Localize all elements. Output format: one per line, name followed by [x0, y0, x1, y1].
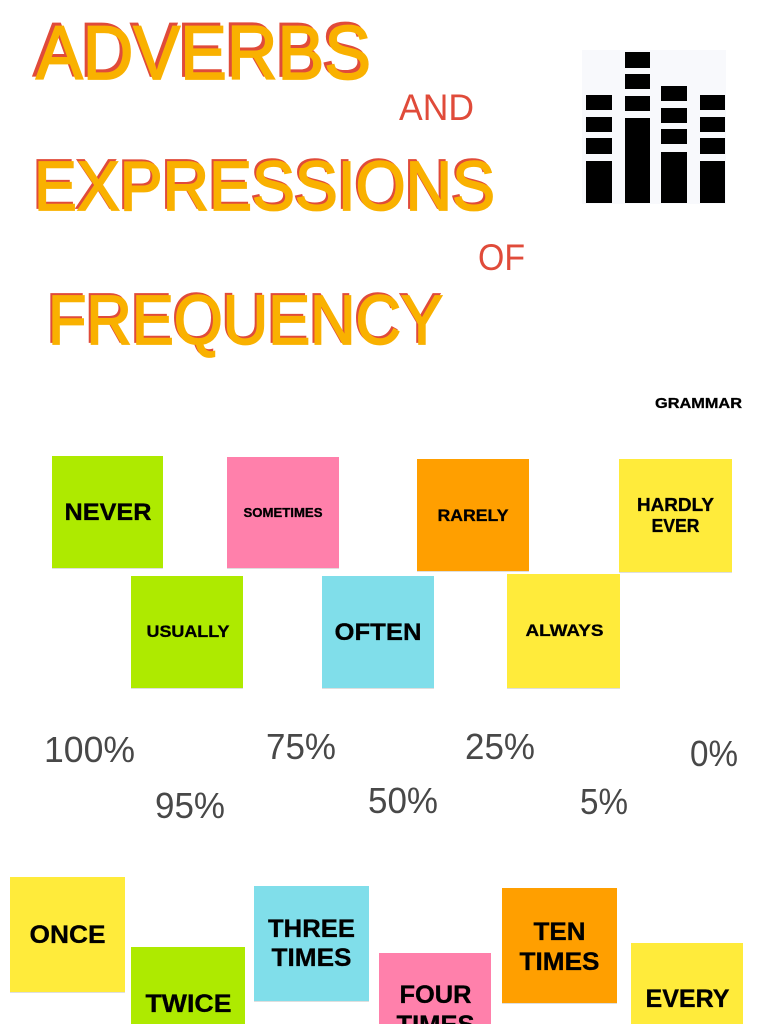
sticky note: FOUR TIMES: FOUR [400, 981, 472, 1009]
icon: frequency bars [582, 50, 726, 204]
sticky note: TEN TIMES: TIMES [520, 948, 600, 976]
sticky note: SOMETIMES: SOMETIMES [244, 505, 323, 520]
percent: 5%: 5% [580, 781, 628, 822]
title word: ADVERBS: ADVERBS [33, 8, 368, 93]
sticky note: NEVER: NEVER [64, 499, 152, 526]
sticky note: ONCE: ONCE [30, 921, 106, 949]
percent: 95%: 95% [155, 785, 225, 826]
sticky note: HARDLY EVER: EVER [652, 516, 700, 536]
sticky note: OFTEN: OFTEN [334, 619, 422, 646]
title word: FREQUENCY: FREQUENCY [46, 279, 441, 357]
sticky note: TEN TIMES [502, 888, 617, 1004]
sticky note: SOMETIMES [227, 457, 339, 569]
sticky note: USUALLY: USUALLY [146, 622, 230, 641]
title word: ADVERBS: ADVERBS [36, 11, 371, 96]
sticky note: RARELY: RARELY [438, 506, 509, 525]
percent: 0%: 0% [690, 733, 738, 774]
sticky note: EVERY [631, 943, 743, 1024]
sticky note: HARDLY EVER: HARDLY [637, 495, 714, 515]
title word: AND: AND [399, 87, 474, 128]
percent: 25%: 25% [465, 726, 535, 767]
sticky note: TWICE: TWICE [146, 990, 232, 1018]
sticky note: EVERY: EVERY [646, 985, 730, 1013]
sticky note: OFTEN [322, 576, 434, 689]
sticky note: NEVER [52, 456, 163, 569]
sticky note: FOUR TIMES [379, 953, 491, 1024]
percent: 50%: 50% [368, 780, 438, 821]
sticky note: TWICE [131, 947, 245, 1024]
sticky note: HARDLY EVER [619, 459, 732, 573]
label: GRAMMAR: GRAMMAR [655, 395, 742, 412]
sticky note: THREE TIMES [254, 886, 369, 1002]
percent: 75%: 75% [266, 726, 336, 767]
sticky note: ONCE [10, 877, 125, 993]
title word: EXPRESSIONS: EXPRESSIONS [32, 145, 493, 223]
sticky note: USUALLY [131, 576, 243, 689]
title word: OF: OF [478, 237, 525, 278]
percent: 100%: 100% [44, 729, 135, 770]
title word: EXPRESSIONS: EXPRESSIONS [34, 147, 495, 225]
sticky note: ALWAYS [507, 574, 620, 689]
percentage scale [44, 726, 738, 826]
title word: FREQUENCY: FREQUENCY [48, 281, 443, 359]
title [32, 8, 525, 359]
sticky note: THREE TIMES: TIMES [272, 944, 352, 972]
sticky note: ALWAYS: ALWAYS [526, 621, 604, 640]
sticky note: TEN TIMES: TEN [534, 918, 586, 946]
sticky note: RARELY [417, 459, 529, 572]
sticky note: THREE TIMES: THREE [268, 915, 355, 943]
